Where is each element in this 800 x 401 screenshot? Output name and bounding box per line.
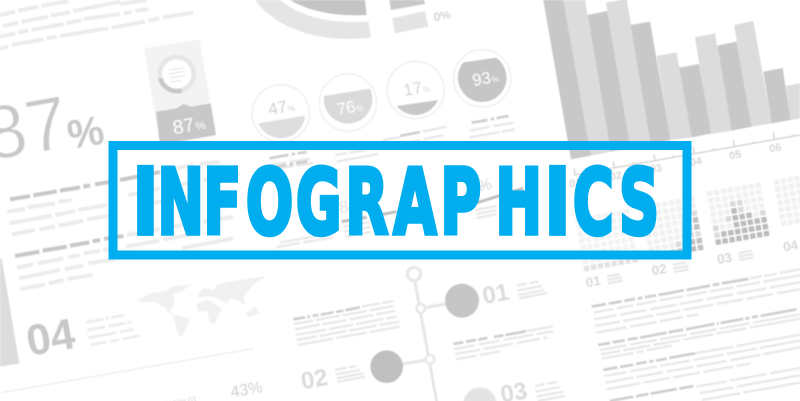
node: circle 03 (463, 387, 497, 401)
gauge: 93 percent (454, 50, 511, 107)
grid labels: 01 (585, 273, 602, 290)
timeline paragraph (453, 326, 553, 359)
left side bar (0, 258, 19, 367)
timeline (370, 267, 547, 401)
pixel grid 03 (707, 185, 771, 243)
big number 04 with text (23, 310, 139, 366)
big stat: 87 percent (0, 73, 108, 176)
divider rule and 43 percent stat: 43% (229, 379, 264, 401)
bar fragments with 0 percent (389, 0, 452, 33)
divider rule and 43 percent stat (2, 348, 264, 401)
gauge: 47 percent: 47% (267, 96, 296, 119)
chart axis (568, 132, 800, 191)
step 03 lines (535, 382, 565, 401)
gauge: 17 percent (387, 61, 444, 119)
panel: 87 percent card: 87% (171, 113, 207, 139)
small items behind title: 8 (337, 196, 350, 217)
donut chart fragment (255, 0, 371, 39)
node: joint two (426, 355, 434, 364)
title: CS (573, 151, 659, 255)
chart axis: 02 (609, 169, 623, 183)
gauge: 17 percent: 17% (402, 77, 431, 100)
title: I (136, 154, 155, 249)
captions below gauges (269, 116, 515, 170)
node: joint one (416, 304, 425, 313)
big number 04 with text: 04 (23, 310, 79, 366)
title frame (113, 146, 687, 255)
step 01 lines (517, 281, 547, 298)
world map (138, 276, 267, 337)
small items behind title: 8% (468, 176, 494, 197)
chart axis: 01 (568, 177, 582, 191)
grid labels: 03 (716, 250, 733, 267)
panel: top left text block (0, 0, 193, 48)
chart axis: 03 (649, 162, 663, 176)
title: I (548, 154, 567, 249)
gauge: 76 percent (319, 74, 377, 131)
node: ring top (407, 267, 421, 281)
pixel grid 02 (641, 199, 705, 257)
grid labels (585, 237, 800, 290)
panel: 87 percent card (144, 39, 216, 145)
step label 01: 01 (480, 279, 511, 310)
grid labels: 04 (782, 237, 800, 255)
small items behind title (268, 161, 523, 247)
chart axis: 06 (768, 141, 782, 155)
node: circle 02 (370, 350, 403, 383)
node: circle 01 (445, 284, 479, 318)
big stat: 87 percent: % (64, 106, 107, 158)
title: NFOGRAPH (157, 151, 542, 255)
chart axis: 04 (689, 155, 703, 169)
chart axis: 05 (728, 148, 742, 162)
pixel grid 04 (774, 177, 800, 224)
panel: left text block (7, 200, 233, 289)
grid labels: 02 (651, 261, 668, 278)
center paragraph (293, 301, 400, 345)
gauge: 47 percent (252, 85, 309, 142)
bar chart (543, 0, 800, 191)
gauge: 76 percent: 76% (335, 96, 365, 119)
panel: right text paragraphs (592, 269, 800, 401)
bar fragments with 0 percent: 0% (432, 7, 452, 24)
step label 02 with text (299, 364, 365, 395)
inner dark heading line, left (10, 172, 160, 199)
gauge: 93 percent: 93% (471, 67, 500, 90)
pixel grid 01 (575, 211, 639, 269)
step label 02 with text: 02 (299, 364, 330, 395)
